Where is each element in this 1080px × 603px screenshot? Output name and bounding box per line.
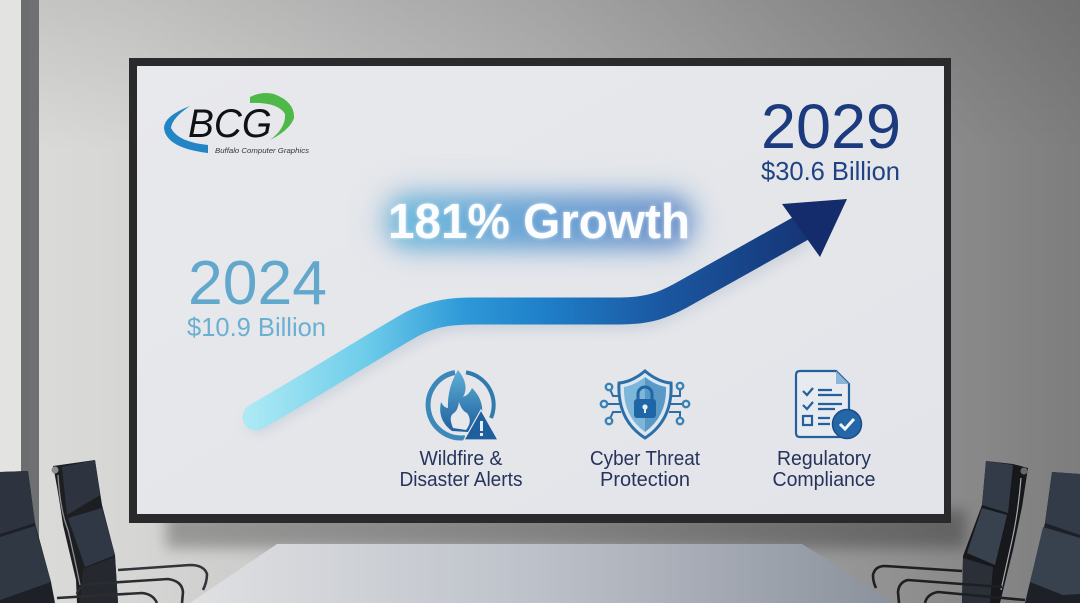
label: disaster alerts: Disaster Alerts (400, 469, 522, 491)
value 2024: $10.9 Billion (187, 312, 326, 342)
feature: wildfire and disaster alerts (400, 370, 522, 491)
conference table (190, 544, 895, 603)
logo: BCG (164, 93, 309, 155)
display screen surface (137, 66, 944, 514)
icon: shield with padlock and circuit nodes (601, 371, 689, 438)
chair: far right (1025, 472, 1080, 603)
arrow head (782, 199, 847, 257)
logo swoosh blue (164, 106, 208, 153)
headline text: 181% Growth (388, 195, 690, 249)
window frame at left (0, 0, 39, 603)
feature: regulatory compliance (772, 371, 876, 491)
logo swoosh green (250, 93, 294, 140)
logo wordmark: BCG (188, 102, 272, 146)
chair: second left (52, 460, 207, 603)
arrow shadow (258, 240, 800, 423)
headline glow (390, 197, 690, 247)
growth arrow (256, 199, 847, 423)
screen shadow on wall (166, 510, 966, 548)
value 2029: $30.6 Billion (761, 156, 900, 186)
year 2029: 2029 (761, 92, 901, 162)
year 2024: 2024 (188, 249, 327, 318)
chair: far left (0, 471, 55, 603)
label: wildfire: Wildfire & (420, 448, 503, 470)
logo tagline: Buffalo Computer Graphics (215, 146, 309, 155)
label: regulatory: Regulatory (777, 448, 871, 470)
headline text: 181% Growth (388, 195, 690, 249)
display screen frame (129, 58, 951, 523)
arrow shaft (256, 226, 805, 417)
label: cyber threat: Cyber Threat (590, 448, 700, 470)
start label 2024 (187, 249, 327, 342)
icon: checklist document with check badge (796, 371, 862, 438)
label: compliance: Compliance (772, 469, 876, 491)
chairs left (0, 460, 207, 603)
headline outer halo (380, 190, 700, 252)
label: protection: Protection (600, 469, 690, 491)
chair: second right (873, 461, 1028, 603)
feature: cyber threat protection (590, 371, 700, 491)
icon: flame with warning triangle (428, 370, 498, 440)
chairs right (873, 461, 1080, 603)
headline: 181% Growth (380, 190, 700, 252)
end label 2029 (761, 92, 901, 186)
